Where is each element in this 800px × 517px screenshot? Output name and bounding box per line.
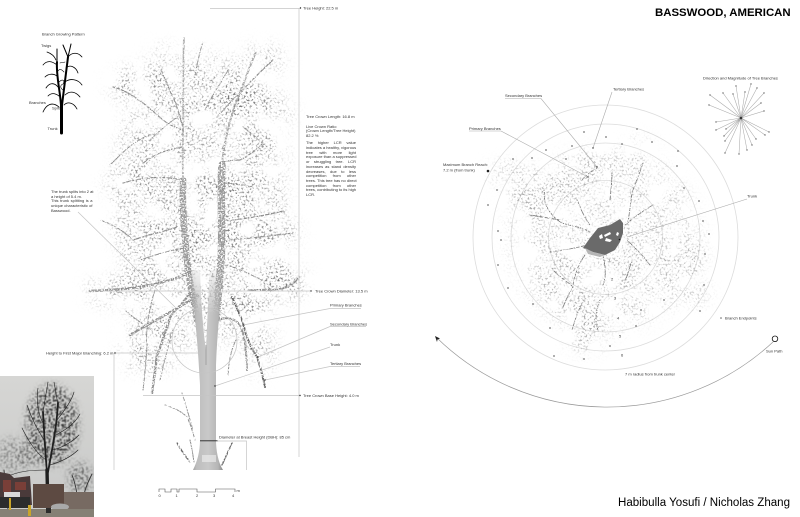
text block: live crown ratio: The higher LCR value <box>306 140 356 145</box>
radius numbers: 2 <box>611 276 614 282</box>
plan labels <box>443 76 782 376</box>
label: branch pattern text: Twigs <box>41 43 51 48</box>
plan labels: Maximum Branch Reach: <box>443 162 488 167</box>
text block: live crown ratio: 82.2 % <box>306 133 318 138</box>
plan labels: Sun Path <box>766 348 782 354</box>
text block: live crown ratio <box>306 114 357 197</box>
houses in photo <box>0 472 94 517</box>
measure: dots and DBH line <box>114 7 312 441</box>
plan labels: Primary Branches <box>469 126 501 131</box>
text block: live crown ratio: or struggling tree. LCR <box>306 159 356 164</box>
panel: plan view of crown <box>443 76 782 376</box>
branch endpoints <box>487 128 710 360</box>
text block: trunk split note: a height of 5.4 m. <box>51 194 82 199</box>
labels: tree measurements: Trunk <box>330 342 340 347</box>
text block: trunk split note: The trunk splits into 2 at <box>51 189 93 194</box>
labels: tree measurements: Tertiary Branches <box>330 361 361 366</box>
tree canopy in photo <box>0 382 92 514</box>
label: branch pattern text: Branches <box>29 100 46 105</box>
radius numbers: 4 <box>617 316 620 320</box>
labels: tree measurements: Tree Height: 22.5 m <box>303 6 339 10</box>
radius numbers: 3 <box>614 296 617 300</box>
text block: trunk split note: This trunk splitting is a <box>51 198 92 203</box>
scale bar: m <box>236 488 240 493</box>
scale bar: 2 <box>196 493 199 498</box>
plan labels: 7.2 m (from trunk) <box>443 168 475 172</box>
radius numbers: 5 <box>619 334 622 338</box>
labels: tree measurements: Height to First Major Branching: 6.2 m <box>46 350 114 356</box>
text block: live crown ratio: increases as stand density <box>306 164 356 169</box>
plan labels: Trunk <box>747 194 757 198</box>
trunk <box>190 270 223 470</box>
plan labels: Direction and Magnitude of Tree Branches <box>703 76 778 80</box>
plan labels: Secondary Branches <box>505 93 542 98</box>
authors: Habibulla Yosufi / Nicholas Zhang <box>618 497 790 509</box>
radius numbers <box>608 258 624 358</box>
scale bar: 0 <box>158 493 162 498</box>
photo of tree <box>0 376 94 517</box>
labels: tree measurements: Tree Crown Diameter: 13.5 m <box>315 288 368 294</box>
branch structure <box>90 38 300 465</box>
text block: trunk split note: unique characteristic of <box>51 203 92 208</box>
text block: trunk split note <box>51 189 94 213</box>
text block: live crown ratio: competition from other <box>306 173 356 178</box>
radius numbers: 6 <box>621 352 624 358</box>
plan leader ends <box>487 147 598 178</box>
icon: branch growing pattern <box>43 44 82 133</box>
plan labels: 7 m radius from trunk center <box>625 372 676 376</box>
scale bar: 1 <box>176 493 178 498</box>
plan branches <box>530 163 653 330</box>
text block: live crown ratio: Live Crown Ratio <box>306 124 336 129</box>
range rings <box>473 105 738 370</box>
text block: live crown ratio: Tree Crown Length: 16.8 m <box>306 114 355 118</box>
sun path arc <box>435 336 778 407</box>
plan labels: Branch Endpoints <box>725 316 757 320</box>
label: branch pattern text: Branch Growing Pattern <box>42 32 85 36</box>
plan speckle <box>491 140 705 352</box>
chart: direction and magnitude star <box>708 83 770 155</box>
scale bar: 3 <box>213 493 216 498</box>
labels: tree measurements: Tree Crown Base Height: 4.0 m <box>303 393 360 398</box>
labels: tree measurements <box>46 6 368 440</box>
label: branch pattern text: Trunk <box>48 126 58 131</box>
text block: live crown ratio: competition from other <box>306 183 356 188</box>
text block: live crown ratio: exposure than a suppressed <box>306 154 356 159</box>
scale bar <box>158 488 240 498</box>
labels: tree measurements: Primary Branches <box>330 302 362 308</box>
plan labels: Tertiary Branches <box>613 86 644 92</box>
text block: live crown ratio: (Crown Length/Tree Height) <box>306 128 355 133</box>
text block: live crown ratio: trees, contributing to its high <box>306 187 356 192</box>
label: branch pattern text <box>29 32 85 131</box>
text block: live crown ratio: LCR. <box>306 192 315 197</box>
labels: tree measurements: Diameter at Breast Height (DBH): 85 cm <box>219 434 291 440</box>
text block: live crown ratio: tree with more light <box>306 150 356 155</box>
panel: tree elevation point cloud <box>88 38 304 470</box>
text block: live crown ratio: indicates a healthy, vigorous <box>306 145 356 150</box>
measure: vertical crown lines <box>78 8 366 470</box>
title: BASSWOOD, AMERICAN <box>655 6 791 18</box>
trunk section <box>583 219 623 257</box>
label: branch pattern text: Split <box>52 106 61 110</box>
radius numbers: 1 <box>608 258 611 262</box>
plan leaders <box>469 92 747 237</box>
labels: tree measurements: Secondary Branches <box>330 322 367 326</box>
text block: live crown ratio: trees. This tree has no direct <box>306 178 357 183</box>
text block: trunk split note: Basswood. <box>51 208 71 213</box>
scale bar: 4 <box>232 493 235 498</box>
text block: live crown ratio: decreases, due to less <box>306 169 356 174</box>
canopy speckle <box>88 48 304 373</box>
